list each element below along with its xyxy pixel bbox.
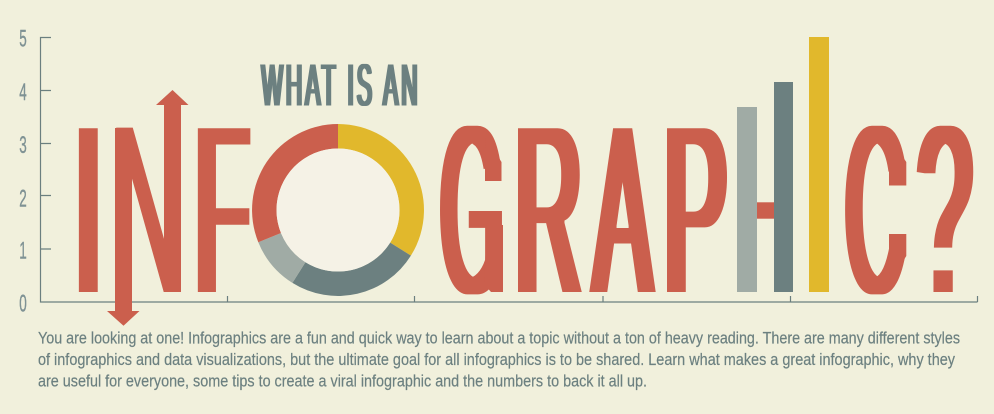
title letters: I and F: I: [75, 75, 101, 344]
chart axes: [40, 38, 978, 302]
title letters: GRAP: [441, 74, 727, 345]
title letters: GRAP: R: [516, 75, 582, 345]
bar chart: letters H and I: [737, 37, 829, 292]
y axis labels: [19, 25, 27, 318]
title letters: C?: C: [846, 76, 904, 345]
title letters: C?: ?: [918, 75, 972, 344]
y axis labels: 3: [19, 132, 27, 159]
y axis labels: 2: [19, 185, 27, 213]
arrow: up from N: [156, 90, 188, 292]
title letters: GRAP: A: [594, 76, 651, 345]
intro paragraph: [38, 328, 960, 391]
title letters: I and F: F: [196, 76, 249, 345]
title letters: GRAP: P: [664, 74, 727, 344]
donut chart: letter O: [252, 124, 424, 296]
y axis labels: 1: [19, 237, 27, 265]
title letters: I and F: [75, 75, 249, 345]
heading: what is an: WHAT IS AN: [262, 54, 421, 119]
y axis labels: 5: [19, 25, 27, 53]
arrow: down from N: [107, 128, 140, 326]
y axis labels: 0: [19, 290, 27, 318]
intro paragraph: are useful for everyone, some tips to create a viral infographic and the numbers to back it all up.: [38, 372, 647, 391]
title letter: N: N: [110, 78, 187, 344]
letter C terminals: [889, 138, 906, 282]
title letters: C?: [846, 75, 972, 345]
letter G terminal and spur: [484, 138, 503, 292]
y axis labels: 4: [19, 79, 27, 106]
title letters: GRAP: G: [441, 77, 503, 345]
